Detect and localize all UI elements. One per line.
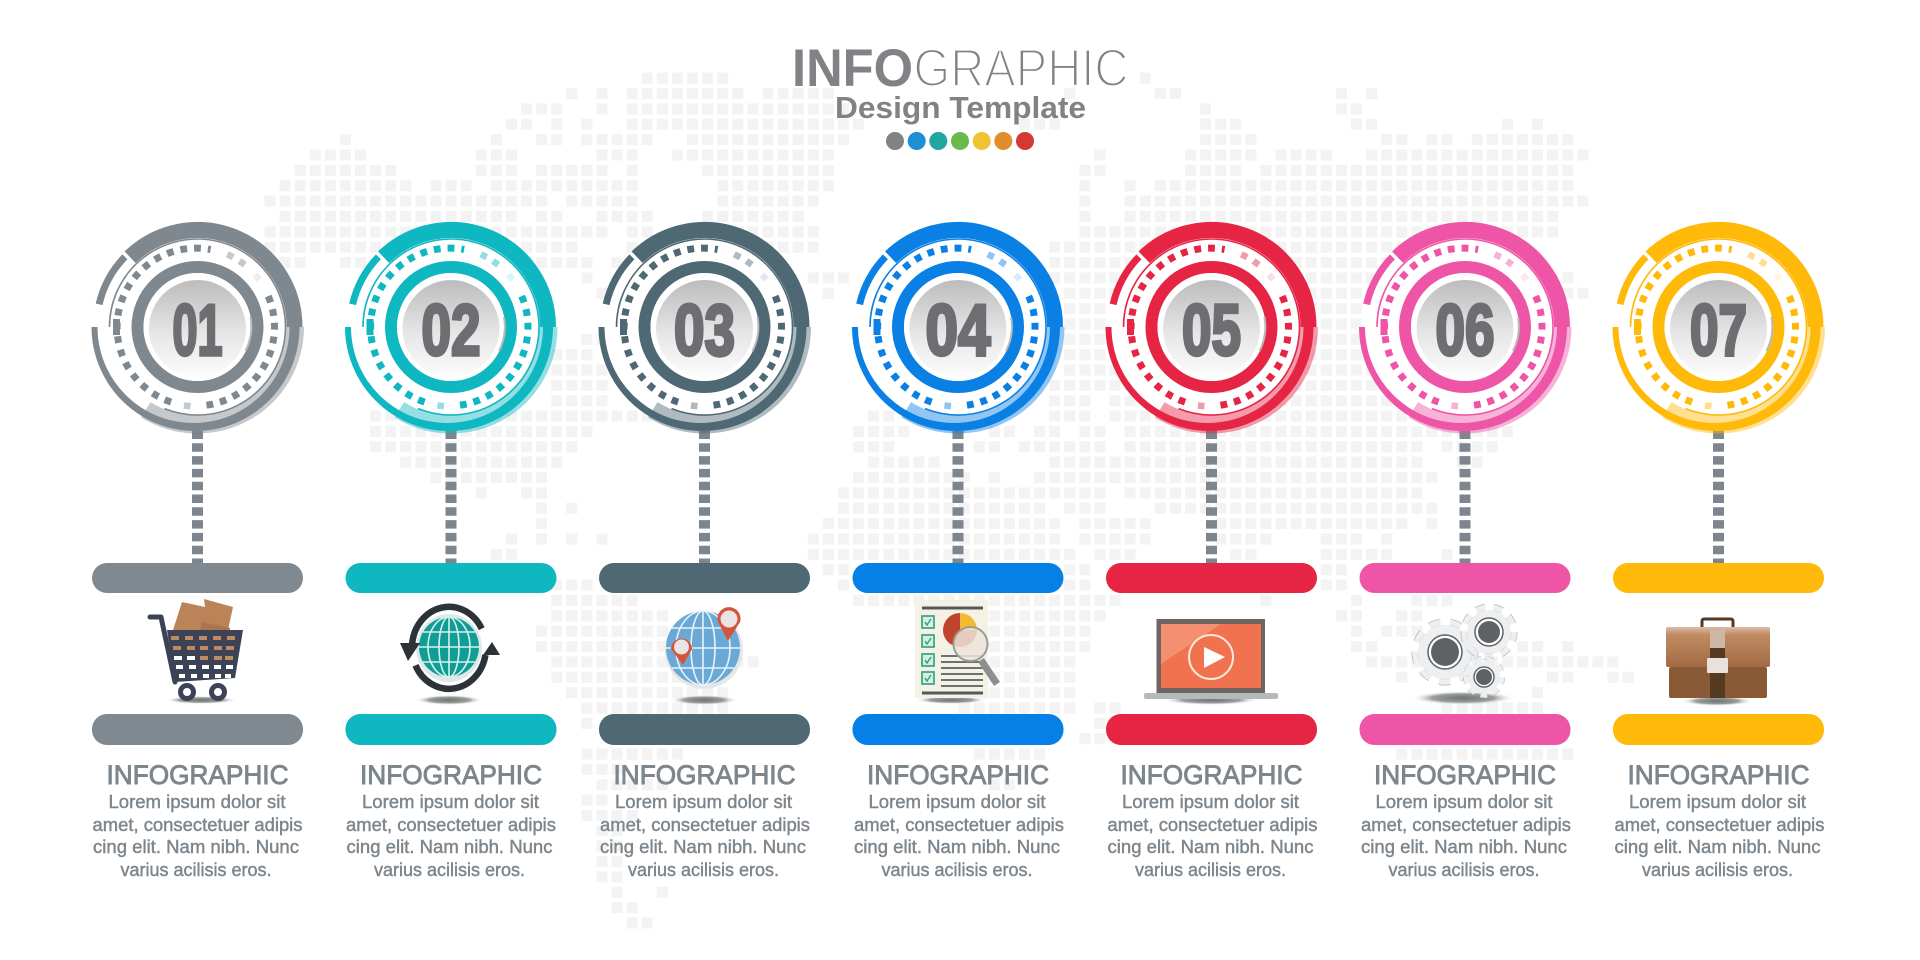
body text: cing elit. Nam nibh. Nunc [1614, 836, 1820, 857]
top bar [1360, 563, 1570, 593]
heading: INFOGRAPHIC [1120, 760, 1302, 790]
heading: INFOGRAPHIC [867, 760, 1049, 790]
connector [1206, 430, 1217, 563]
number ring 06: 06 [1436, 291, 1494, 371]
heading: INFOGRAPHIC [360, 760, 542, 790]
background: dotted world map [264, 78, 1638, 923]
bottom bar [346, 714, 556, 745]
body text: varius acilisis eros. [882, 859, 1032, 880]
bottom bar [1106, 714, 1317, 745]
number ring 04: 04 [926, 291, 990, 371]
top bar [346, 563, 556, 593]
subtitle: Design Template [835, 90, 1086, 125]
number ring 04 [852, 223, 1062, 431]
body text: amet, consectetuer adipis [600, 814, 810, 835]
body text: cing elit. Nam nibh. Nunc [600, 836, 806, 857]
body text: varius acilisis eros. [1135, 859, 1286, 880]
top bar [852, 563, 1064, 593]
icon: laptop with play button [1144, 619, 1278, 705]
number ring 06 [1359, 223, 1569, 431]
number ring 07: 07 [1690, 291, 1747, 371]
body text [600, 791, 810, 880]
icon: report with magnifier [915, 600, 997, 704]
heading: INFOGRAPHIC [106, 760, 288, 790]
top bar [599, 563, 810, 593]
body text: Lorem ipsum dolor sit [1376, 791, 1552, 812]
number ring 05 [1106, 223, 1316, 431]
bottom bar [1613, 714, 1824, 745]
connector [952, 430, 964, 563]
number ring 07 [1612, 223, 1822, 431]
bottom bar [1360, 714, 1570, 745]
title: INFOGRAPHIC: INFO [792, 39, 913, 98]
body text: Lorem ipsum dolor sit [1629, 791, 1806, 812]
number ring 03 [598, 223, 808, 431]
body text: amet, consectetuer adipis [92, 814, 302, 835]
body text: cing elit. Nam nibh. Nunc [854, 836, 1060, 857]
bottom bar [599, 714, 810, 745]
number ring 03: 03 [674, 291, 735, 371]
connector [446, 430, 456, 563]
heading: INFOGRAPHIC [1374, 760, 1556, 790]
body text: varius acilisis eros. [374, 859, 525, 880]
number ring 01: 01 [172, 291, 222, 371]
body text: cing elit. Nam nibh. Nunc [1108, 836, 1314, 857]
body text: amet, consectetuer adipis [1614, 814, 1824, 835]
panel: step 03 [598, 223, 810, 880]
title block [792, 39, 1128, 150]
panel: step 01 [92, 223, 303, 880]
connector [1713, 430, 1724, 563]
connector [192, 430, 203, 563]
panel: step 06 [1359, 223, 1571, 880]
number ring 01 [92, 223, 302, 431]
body text: Lorem ipsum dolor sit [615, 791, 792, 812]
body text: Lorem ipsum dolor sit [108, 791, 286, 812]
body text [1361, 791, 1571, 880]
bottom bar [92, 714, 303, 745]
body text: cing elit. Nam nibh. Nunc [346, 836, 552, 857]
panel: step 07 [1612, 223, 1824, 880]
title: INFOGRAPHIC: GRAPHIC [914, 39, 1128, 98]
connector [1460, 430, 1470, 563]
body text: varius acilisis eros. [1642, 859, 1793, 880]
body text [92, 791, 302, 880]
body text: amet, consectetuer adipis [346, 814, 556, 835]
body text: cing elit. Nam nibh. Nunc [1361, 836, 1567, 857]
body text: cing elit. Nam nibh. Nunc [93, 836, 299, 857]
body text: Lorem ipsum dolor sit [1122, 791, 1299, 812]
icon: gears [1411, 607, 1515, 705]
colour dots [886, 132, 1034, 150]
icon: briefcase [1666, 619, 1770, 706]
body text: varius acilisis eros. [120, 859, 272, 880]
body text [346, 791, 556, 880]
body text: Lorem ipsum dolor sit [868, 791, 1046, 812]
icon: rotating globe [400, 607, 500, 705]
number ring 02: 02 [422, 291, 480, 371]
top bar [92, 563, 303, 593]
top bar [1106, 563, 1317, 593]
number ring 02 [345, 223, 555, 431]
body text [1614, 791, 1824, 880]
panel: step 02 [345, 223, 556, 880]
body text: varius acilisis eros. [1388, 859, 1540, 880]
body text: varius acilisis eros. [628, 859, 779, 880]
heading: INFOGRAPHIC [614, 760, 796, 790]
body text: amet, consectetuer adipis [1361, 814, 1571, 835]
title: INFOGRAPHIC [792, 39, 1128, 98]
panel: step 05 [1106, 223, 1318, 880]
icon: shopping cart [150, 599, 243, 704]
top bar [1613, 563, 1824, 593]
heading: INFOGRAPHIC [1628, 760, 1810, 790]
body text: amet, consectetuer adipis [1108, 814, 1318, 835]
bottom bar [852, 714, 1064, 745]
connector [699, 430, 710, 563]
body text [854, 791, 1064, 880]
body text [1108, 791, 1318, 880]
icon: globe with pins [665, 607, 743, 705]
panel: step 04 [852, 223, 1064, 880]
number ring 05: 05 [1182, 291, 1241, 371]
body text: amet, consectetuer adipis [854, 814, 1064, 835]
body text: Lorem ipsum dolor sit [362, 791, 539, 812]
